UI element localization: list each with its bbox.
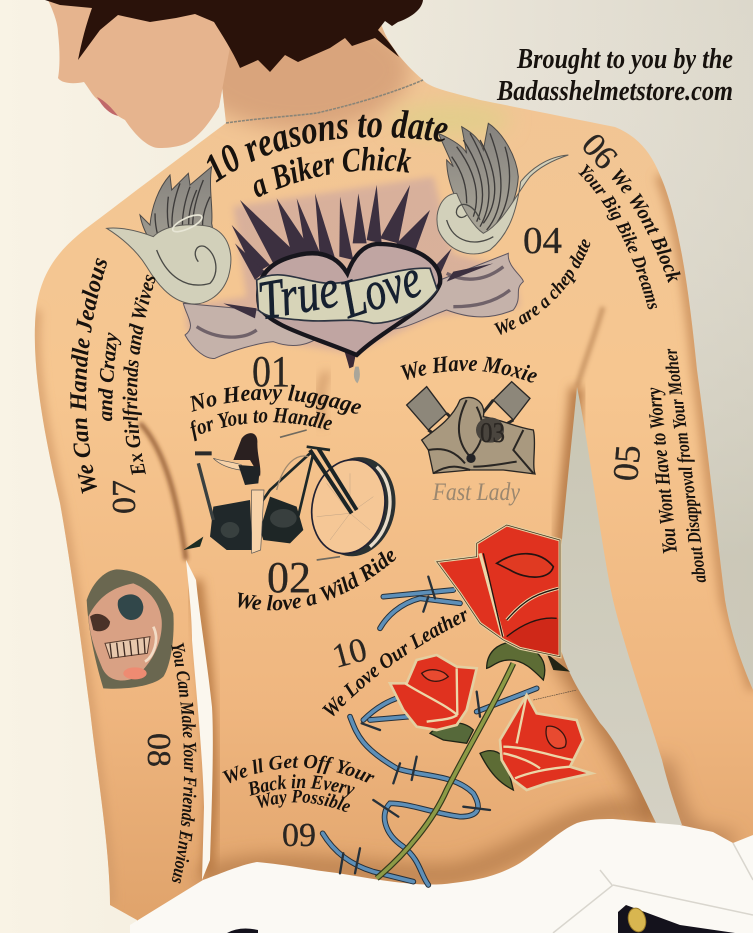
title: a Biker Chick	[254, 146, 412, 197]
reason 06: Your Big Bike Dreams	[578, 164, 657, 310]
reason 09: We ll Get Off Your	[222, 755, 375, 784]
tattoo: engine rose	[407, 382, 535, 506]
reason 05	[605, 348, 706, 582]
reason 03: 03	[480, 418, 505, 449]
reason 09: Way Possible	[256, 790, 350, 812]
true love lettering: True	[253, 257, 343, 331]
reason 04: We are a chep date	[494, 239, 590, 335]
reason 06	[574, 127, 681, 310]
reason 07: 07	[106, 480, 143, 514]
reason 08	[140, 642, 196, 884]
reason 09: 09	[282, 817, 316, 854]
tattoo: motorcycle and rider	[183, 430, 405, 564]
gap between left arm and torso	[186, 560, 213, 880]
fast lady script: Fast Lady	[432, 479, 521, 506]
reason 01	[190, 347, 362, 442]
purple ray glow	[187, 177, 520, 353]
small right rose	[500, 695, 592, 790]
barbed wire	[323, 577, 537, 885]
reason 08: 08	[140, 733, 177, 767]
left bird wing	[140, 167, 213, 273]
reason 01: for You to Handle	[190, 408, 332, 442]
reason 01: No Heavy luggage	[190, 384, 362, 415]
reason 01: 01	[252, 347, 290, 396]
tattoo: swallows and true love heart	[107, 123, 568, 383]
hair	[45, 0, 423, 72]
tattoo: skull	[87, 569, 174, 689]
reason 10: 10	[328, 631, 371, 676]
reason 04: 04	[523, 220, 562, 262]
necklace	[226, 80, 423, 123]
reason 10: We Love Our Leather	[322, 610, 467, 716]
reason 07	[70, 258, 156, 514]
right bird body	[437, 155, 568, 254]
reason 05: 05	[605, 443, 648, 483]
reason 06: We Wont Block	[612, 168, 681, 283]
ribbon right	[383, 253, 523, 329]
ribbon left	[183, 303, 320, 359]
gold button	[626, 906, 648, 933]
reason 07: Ex Girlfriends and Wives	[122, 274, 156, 475]
face and jaw	[48, 0, 235, 148]
title: 10 reasons to date	[206, 110, 448, 182]
reason 02: 02	[267, 553, 311, 602]
right bird wing	[438, 123, 518, 235]
reason 03	[400, 356, 537, 449]
reason 07: and Crazy	[98, 332, 122, 421]
tattoo: roses and barbed wire	[323, 525, 592, 885]
drip	[340, 337, 363, 368]
banner	[257, 268, 437, 323]
reason 03: We Have Moxie	[400, 356, 537, 382]
reason 05: You Wont Have to Worry	[649, 388, 677, 554]
leaves	[487, 642, 545, 680]
lips	[97, 97, 118, 116]
heart	[258, 244, 440, 355]
small left rose	[390, 655, 477, 730]
reason 09: Back in Every	[248, 774, 355, 798]
reason 07: We Can Handle Jealous	[70, 258, 107, 494]
reason 05: about Disapproval from Your Mother	[665, 348, 706, 582]
shirt	[130, 819, 753, 933]
tattoo: swallows and true love heart: Love	[332, 247, 428, 330]
stem	[377, 663, 513, 878]
left bird body	[107, 225, 231, 304]
reason 09	[222, 755, 375, 854]
dark rays	[223, 185, 493, 318]
reason 02: We love a Wild Ride	[238, 550, 396, 610]
reason 08: You Can Make Your Friends Envious	[171, 642, 196, 884]
large rose	[437, 525, 560, 657]
gap between right arm and torso	[556, 387, 682, 825]
reason 06: 06	[574, 127, 624, 177]
credit line	[496, 44, 733, 107]
